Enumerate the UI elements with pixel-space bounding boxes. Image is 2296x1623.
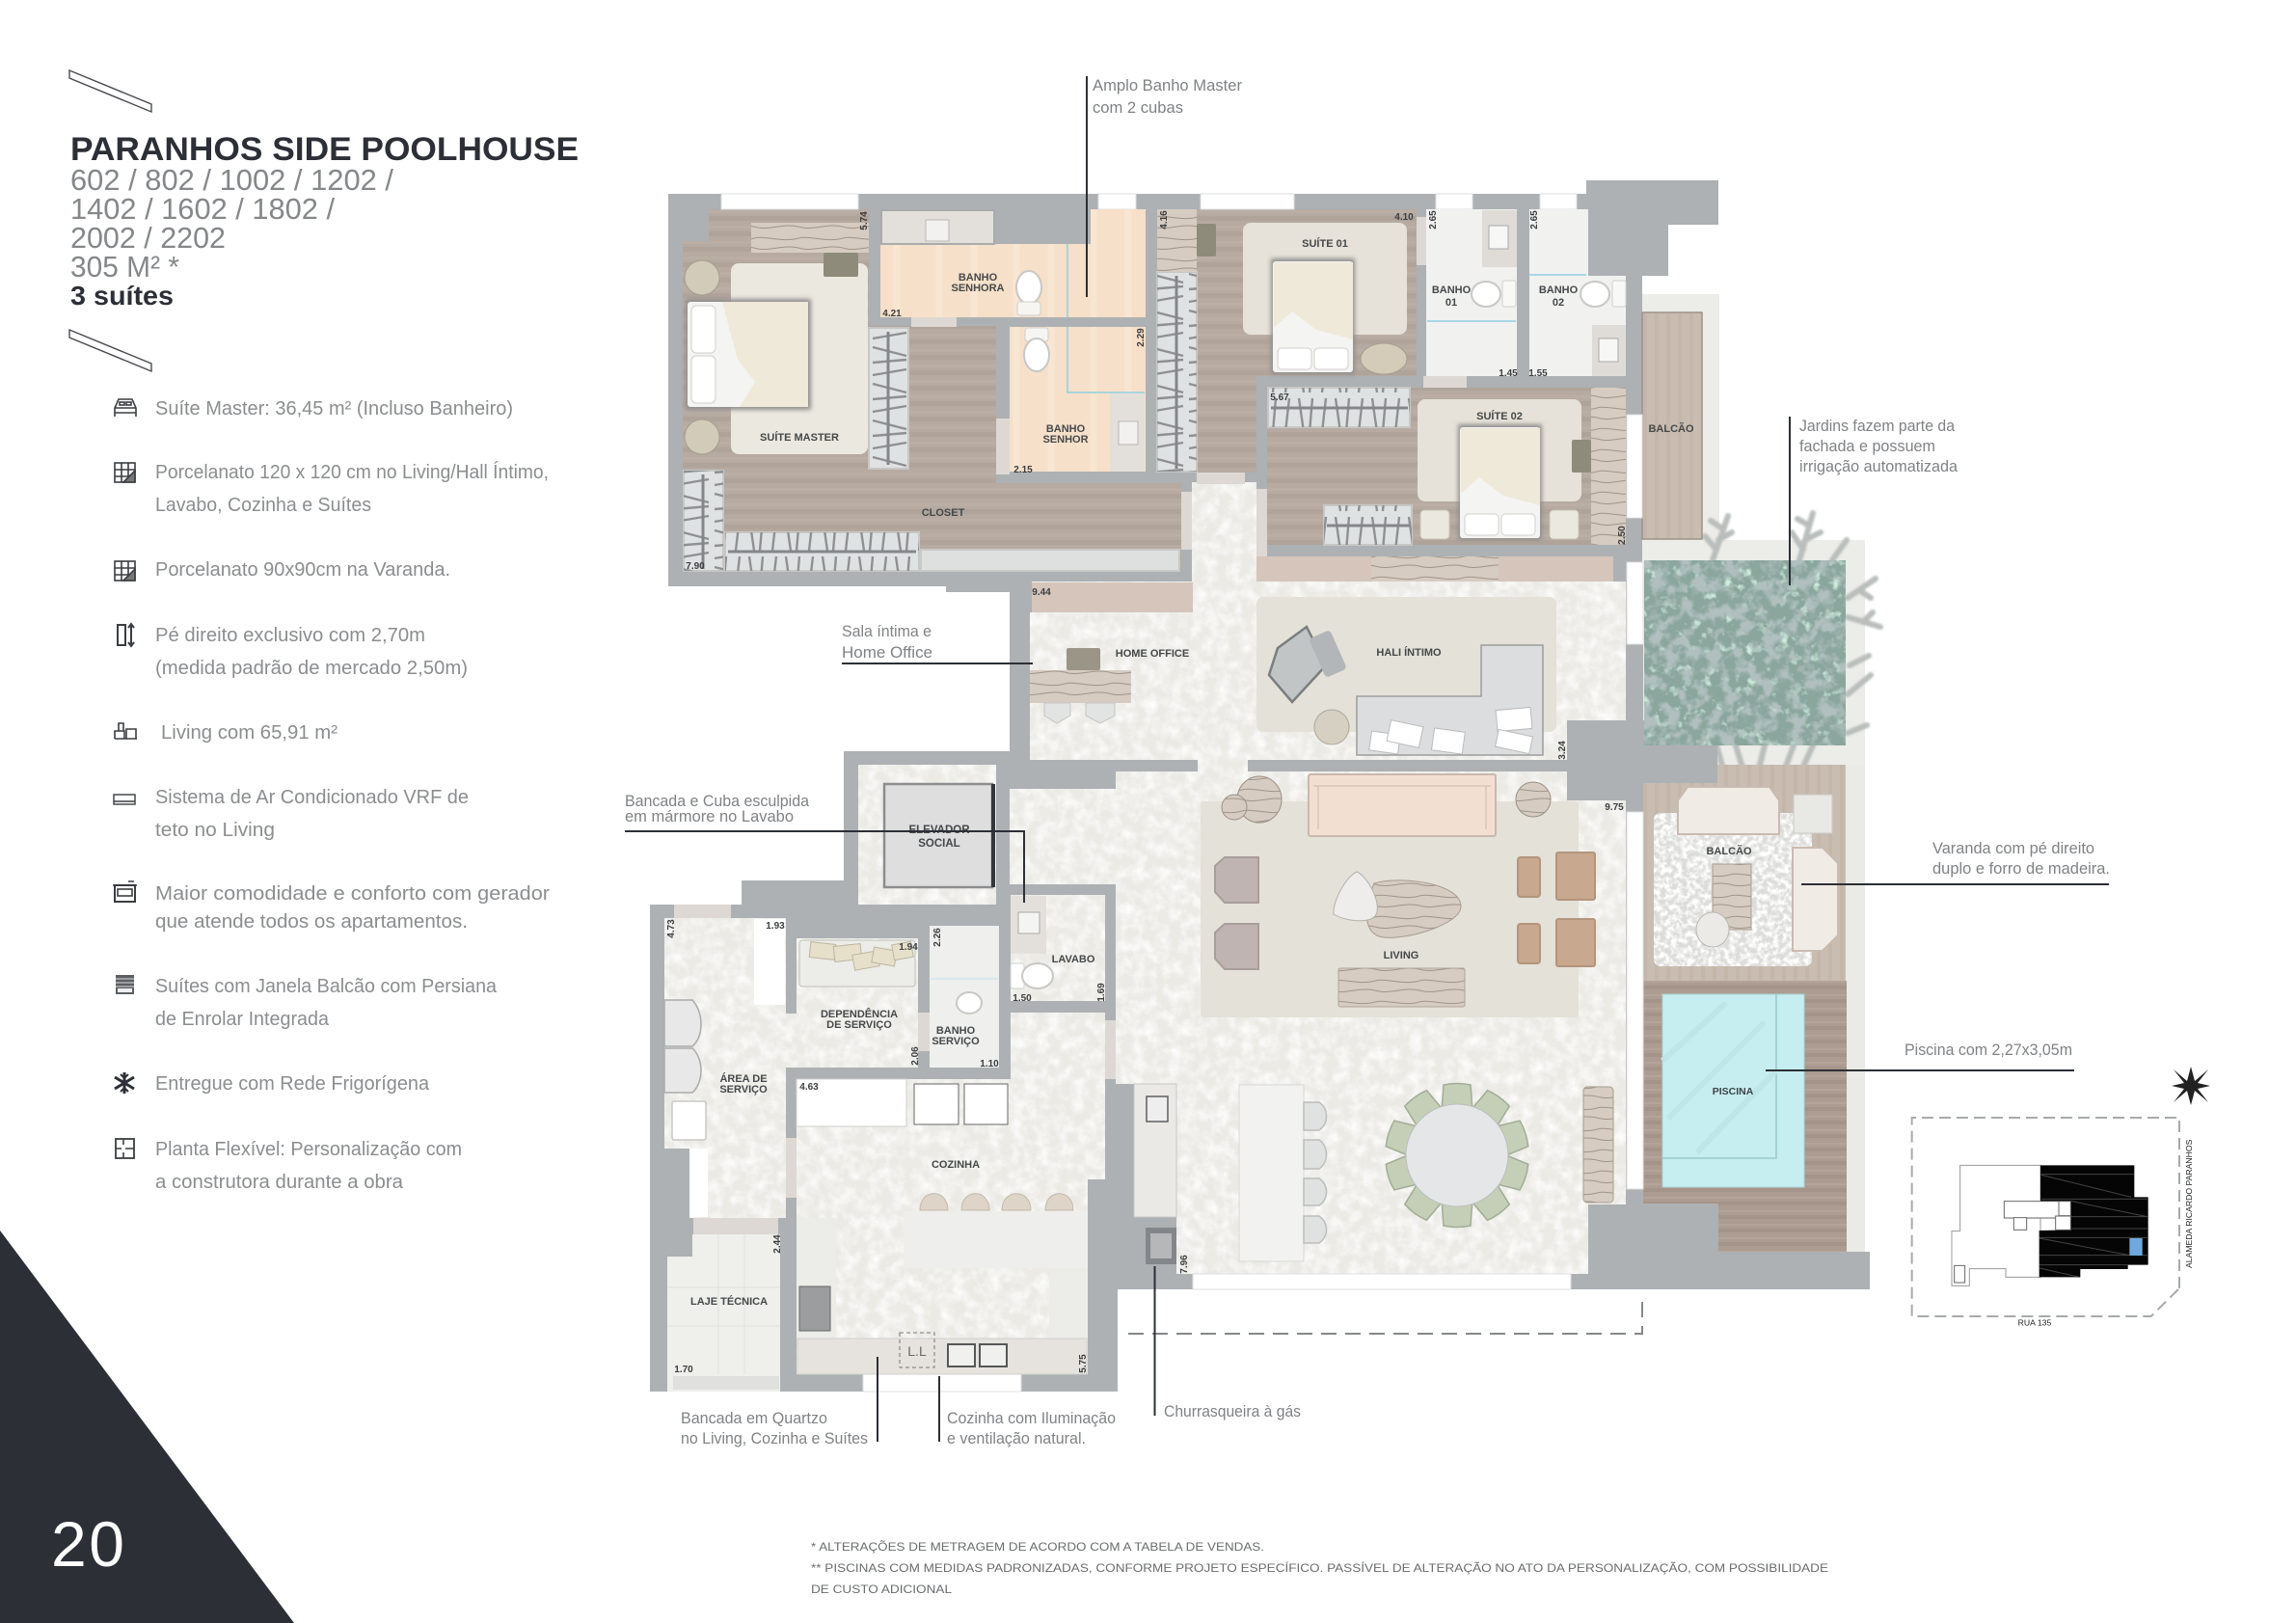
callout: bancada quartzo: Bancada em Quartzo [681, 1409, 827, 1427]
banho 01: BANHO [1432, 284, 1472, 296]
suite 02 [1268, 388, 1626, 545]
features list: Planta Flexível: Personalização com [155, 1139, 462, 1160]
footnotes: ** PISCINAS COM MEDIDAS PADRONIZADAS, CONFORME PROJETO ESPECÍFICO. PASSÍVEL DE ALTERAÇÃO NO ATO DA PERSONALIZAÇÃO, COM POSSIBILIDADE [811, 1560, 1828, 1575]
footnotes: DE CUSTO ADICIONAL [811, 1582, 952, 1596]
bed maid [799, 940, 915, 987]
rug [1201, 801, 1579, 1017]
rug [1243, 223, 1407, 335]
table [1239, 1085, 1304, 1261]
title block [70, 131, 579, 311]
kitchen [797, 1079, 1088, 1374]
callout: banho master: Amplo Banho Master [1093, 76, 1242, 95]
callout: varanda: Varanda com pé direito [1932, 839, 2094, 857]
rug [731, 263, 868, 454]
icon: floor plan [116, 1139, 134, 1158]
icon: snowflake [115, 1072, 134, 1094]
sofa top [1678, 787, 1779, 834]
banho 02: BANHO [1539, 284, 1579, 296]
desk [1030, 670, 1131, 703]
features list [113, 398, 550, 1193]
callout: sala intima [842, 622, 1033, 663]
armchair [1269, 627, 1347, 702]
street labels: RUA 135 [2018, 1318, 2052, 1328]
dimension labels: 1.69 [1096, 983, 1107, 1002]
marble floors: living, hall, service, kitchen [664, 482, 1626, 1374]
icon: floor tile [115, 463, 135, 482]
dimension labels: 4.21 [882, 309, 902, 319]
wood floors: suites and closet [683, 209, 1591, 571]
bed [686, 299, 811, 410]
armchairs left [1215, 857, 1258, 969]
lavabo: LAVABO [1052, 954, 1095, 965]
callout: banho master [1087, 76, 1242, 297]
bed [1458, 424, 1542, 540]
callout: cozinha [939, 1376, 1116, 1447]
back counter [797, 1339, 1087, 1374]
callout: banho master: com 2 cubas [1093, 98, 1183, 117]
dimension labels: 2.65 [1428, 210, 1439, 230]
features list: Suíte Master: 36,45 m² (Incluso Banheiro) [155, 398, 513, 419]
features list: Pé direito exclusivo com 2,70m [155, 625, 425, 646]
cooktop [799, 1286, 830, 1331]
street labels [2018, 1139, 2194, 1328]
elevator [884, 784, 995, 887]
features list: Maior comodidade e conforto com gerador [155, 883, 550, 905]
dimension labels: 2.65 [1529, 210, 1540, 230]
banho senhora: SENHORA [951, 283, 1005, 294]
service area and maid room: ÁREA DE [719, 1072, 768, 1085]
ledge below suite 02 [1256, 556, 1613, 582]
footnotes [811, 1539, 1828, 1596]
corner triangle with page number [0, 1231, 294, 1623]
dimension labels: 5.67 [1270, 392, 1289, 403]
island [904, 1211, 1088, 1268]
chair [1067, 648, 1100, 670]
dimension labels: 2.50 [1617, 526, 1628, 545]
laundry unit [900, 1333, 934, 1367]
rug [1256, 597, 1556, 732]
home office and ledge [1030, 582, 1193, 723]
wood panel [1591, 388, 1626, 545]
gourmet area [1134, 1084, 1613, 1264]
pool [1662, 994, 1804, 1187]
dimension labels: 4.63 [799, 1082, 819, 1093]
side tables [1222, 776, 1551, 823]
dimension labels: 4.10 [1394, 212, 1414, 223]
dining table [1406, 1104, 1508, 1206]
building outline [1952, 1165, 2040, 1285]
callout: jardins: fachada e possuem [1799, 437, 1935, 455]
compass [2172, 1067, 2210, 1105]
shelf [921, 550, 1179, 571]
round table [1314, 710, 1349, 744]
features list: Sistema de Ar Condicionado VRF de [155, 787, 469, 808]
dimension labels: 1.10 [980, 1059, 999, 1069]
dashed terrace outline [1128, 1294, 1642, 1334]
service area and maid room [664, 919, 915, 1217]
banho 01 [1426, 209, 1517, 376]
dimension labels: 7.90 [686, 561, 705, 572]
apartment block [2039, 1165, 2148, 1277]
L sofa [1357, 645, 1543, 755]
service area and maid room: SERVIÇO [719, 1084, 768, 1096]
toilet [1016, 271, 1041, 315]
title block: 602 / 802 / 1002 / 1202 / [70, 163, 393, 197]
dimension labels: 9.44 [1032, 587, 1051, 598]
pool deck [1643, 981, 1847, 1252]
street labels: ALAMEDA RICARDO PARANHOS [2184, 1139, 2194, 1268]
features list: Entregue com Rede Frigorígena [155, 1073, 430, 1095]
bancada [1482, 210, 1517, 267]
banho 01: 01 [1445, 297, 1457, 309]
dimension labels: 4.16 [1159, 210, 1170, 230]
decorative slash below title [69, 330, 151, 371]
toilet [1024, 328, 1049, 371]
cabinet [1049, 1268, 1088, 1339]
banho servico [930, 926, 999, 1068]
left counter [797, 1218, 836, 1339]
sofa [1309, 774, 1496, 836]
wardrobe near bed [869, 328, 908, 469]
lot outline [1912, 1118, 2179, 1316]
living room: LIVING [1384, 950, 1418, 961]
floor lines on block [2039, 1175, 2147, 1277]
dimension labels: 4.73 [666, 919, 677, 938]
tanks [664, 1000, 701, 1093]
laundry unit: L.L [907, 1343, 927, 1359]
sinks [948, 1344, 1007, 1366]
banho 02: 02 [1553, 297, 1564, 309]
veranda deck [1643, 765, 1846, 981]
callout: churrasqueira: Churrasqueira à gás [1164, 1402, 1301, 1420]
footnotes: * ALTERAÇÕES DE METRAGEM DE ACORDO COM A TABELA DE VENDAS. [811, 1539, 1264, 1554]
features list: Porcelanato 120 x 120 cm no Living/Hall Íntimo, [155, 461, 549, 483]
dimension labels: 1.55 [1528, 368, 1548, 379]
title block: PARANHOS SIDE POOLHOUSE [70, 131, 579, 168]
banho senhor: BANHO [1046, 423, 1086, 435]
veranda furniture [1654, 787, 1838, 966]
counter [1134, 1084, 1176, 1217]
dimension labels: 1.93 [766, 921, 785, 932]
walls [650, 180, 1870, 1392]
decorative slash top [69, 70, 151, 112]
dimension labels: 3.24 [1557, 741, 1568, 760]
title block: 3 suítes [70, 281, 174, 311]
title block: 1402 / 1602 / 1802 / [70, 192, 335, 226]
exterior marble and foliage surrounds [1642, 294, 1880, 1252]
dimension labels: 2.06 [910, 1046, 921, 1066]
cupboard [689, 1149, 708, 1217]
garden with planting [1644, 560, 1846, 745]
wardrobe top [1268, 388, 1410, 427]
banho senhora: BANHO [959, 272, 998, 284]
dimension labels: 9.75 [1605, 802, 1624, 813]
callout: lavabo bancada [625, 792, 1024, 903]
bancada [1110, 393, 1145, 472]
barbecue [1146, 1228, 1176, 1264]
features list: teto no Living [155, 820, 275, 841]
suite 01 [1197, 223, 1407, 374]
key plan [1912, 1118, 2194, 1328]
callout: sala intima: Home Office [842, 643, 932, 662]
bedside tables [685, 260, 719, 454]
dimension labels: 5.75 [1078, 1354, 1089, 1373]
features list: a construtora durante a obra [155, 1172, 404, 1193]
features list: Lavabo, Cozinha e Suítes [155, 495, 371, 516]
callout: jardins: irrigação automatizada [1799, 457, 1958, 475]
features list: (medida padrão de mercado 2,50m) [155, 658, 468, 679]
dining chairs [1384, 1084, 1530, 1227]
banho servico: SERVIÇO [932, 1036, 980, 1047]
banho 02 [1529, 209, 1626, 376]
callout: jardins: Jardins fazem parte da [1799, 417, 1956, 435]
pool marker [2129, 1238, 2143, 1256]
callout: bancada quartzo [681, 1357, 878, 1447]
callout: piscina: Piscina com 2,27x3,05m [1904, 1041, 2072, 1059]
callout: bancada quartzo: no Living, Cozinha e Suítes [681, 1429, 868, 1447]
callout: jardins [1790, 417, 1958, 585]
dimension labels: 2.29 [1136, 328, 1147, 347]
wood panel [1157, 209, 1197, 272]
wardrobe bottom [1324, 505, 1412, 545]
bench [1197, 224, 1216, 257]
icon: generator [113, 881, 137, 902]
bancada [881, 210, 994, 244]
icon: shutter [116, 975, 134, 994]
veranda furniture: BALCÃO [1706, 845, 1752, 857]
dimension labels: 2.44 [772, 1234, 783, 1254]
stools [920, 1194, 1073, 1210]
side table [1361, 343, 1407, 374]
lavabo [1011, 896, 1095, 988]
features list: Suítes com Janela Balcão com Persiana [155, 976, 498, 997]
bench [824, 253, 858, 277]
dimension labels: 1.70 [674, 1365, 693, 1375]
thresholds [674, 217, 1467, 1234]
kitchen: COZINHA [932, 1159, 980, 1171]
refrigerator-white tall unit [754, 919, 785, 1005]
elevator: SOCIAL [918, 838, 960, 850]
nightstands [1420, 510, 1579, 539]
icon: bed [115, 399, 136, 417]
icon: living sofa [115, 723, 137, 739]
desk [751, 223, 869, 253]
dimension labels: 2.26 [932, 928, 943, 947]
elevator: ELEVADOR [908, 825, 970, 836]
living room [1201, 774, 1595, 1017]
wardrobes master: CLOSET [922, 507, 965, 519]
washer [672, 1101, 706, 1140]
armchairs right [1518, 852, 1595, 966]
banho senhora [880, 209, 1146, 317]
dimension labels: 5.74 [859, 211, 870, 230]
dimension labels: 1.50 [1013, 993, 1032, 1004]
hall intimo [1256, 597, 1556, 755]
callout: lavabo bancada: Bancada e Cuba esculpida [625, 792, 810, 810]
banho senhor [1010, 327, 1146, 472]
fridge units [797, 1079, 1008, 1126]
dimension labels: 1.45 [1499, 368, 1518, 379]
title block: 305 M² * [70, 250, 179, 284]
toilet [1472, 281, 1516, 307]
stool [1696, 912, 1729, 947]
features list: Porcelanato 90x90cm na Varanda. [155, 559, 450, 581]
windows [721, 194, 1643, 1392]
title block: 2002 / 2202 [70, 221, 226, 255]
closet wardrobe horizontal [725, 532, 919, 571]
icon: floor tile small [115, 561, 135, 581]
icon: air conditioner [114, 795, 135, 804]
core [1955, 1202, 2070, 1283]
closet wardrobe vertical [684, 471, 723, 571]
callout: cozinha: Cozinha com Iluminação [947, 1409, 1116, 1427]
stools [1044, 703, 1115, 723]
floor plan [650, 180, 1880, 1392]
suite 02: SUÍTE 02 [1476, 410, 1523, 422]
suite master furniture [685, 223, 869, 454]
balcony deck upper: BALCÃO [1648, 422, 1694, 435]
sofa right [1793, 848, 1838, 951]
bench [1338, 968, 1465, 1007]
sideboard [1583, 1087, 1613, 1203]
home office and ledge: HOME OFFICE [1116, 648, 1189, 660]
laje tecnica [667, 1234, 780, 1392]
banho senhor: SENHOR [1042, 434, 1089, 446]
bancada [1592, 325, 1626, 376]
callout: varanda [1801, 839, 2110, 884]
wardrobe right of bath [1157, 272, 1197, 472]
callout: cozinha: e ventilação natural. [947, 1429, 1086, 1447]
suite 01: SUÍTE 01 [1302, 237, 1348, 250]
wardrobes master [684, 209, 1197, 571]
dimension labels: 1.94 [899, 942, 918, 953]
pool: PISCINA [1713, 1086, 1754, 1097]
bar chairs [1304, 1102, 1327, 1243]
hall intimo: HALI ÍNTIMO [1376, 646, 1442, 659]
suite master furniture: SUÍTE MASTER [760, 431, 839, 444]
dimension labels: 7.96 [1179, 1255, 1190, 1274]
features list: Living com 65,91 m² [161, 722, 338, 744]
features list: de Enrolar Integrada [155, 1009, 330, 1030]
balcony deck upper [1642, 312, 1702, 539]
callout: lavabo bancada: em mármore no Lavabo [625, 807, 794, 825]
coffee table [1334, 872, 1461, 937]
side table [1794, 795, 1832, 833]
service area and maid room: DE SERVIÇO [826, 1019, 892, 1031]
callout: sala intima: Sala íntima e [842, 622, 932, 640]
toilet [1580, 281, 1626, 307]
rug [1418, 399, 1581, 501]
rug [1654, 813, 1812, 966]
callout: varanda: duplo e forro de madeira. [1932, 859, 2110, 878]
dimension labels: 2.15 [1013, 465, 1033, 475]
toilet [1011, 963, 1053, 988]
corner triangle with page number: 20 [51, 1508, 124, 1580]
dimension labels [666, 210, 1628, 1375]
bed [1271, 258, 1355, 374]
table [1713, 864, 1751, 930]
icon: ceiling height [118, 624, 134, 646]
banho servico: BANHO [936, 1025, 976, 1037]
service area and maid room: DEPENDÊNCIA [821, 1008, 898, 1020]
bench [1572, 440, 1591, 473]
laje tecnica: LAJE TÉCNICA [690, 1295, 768, 1308]
features list: que atende todos os apartamentos. [155, 911, 468, 933]
